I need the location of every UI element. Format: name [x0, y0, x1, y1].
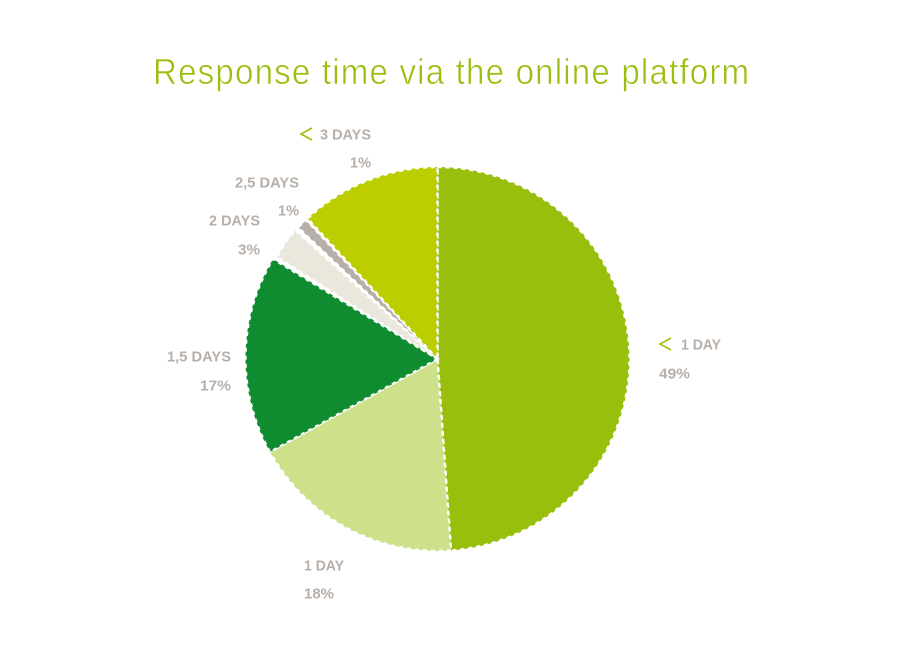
- label: less than 1 day: [659, 336, 721, 382]
- label: 2,5 days: [235, 174, 299, 220]
- label: less than 3 days: [301, 126, 371, 172]
- label: 1,5 days: [167, 348, 231, 394]
- label: less than 1 day: 1 DAY: [681, 336, 721, 354]
- slice: 1 day 18%: [270, 359, 451, 551]
- label: less than 3 days: 1%: [350, 154, 371, 172]
- slice: less than 1 day 49%: [438, 167, 630, 550]
- label: less than 3 days: 3 DAYS: [320, 126, 371, 144]
- title: Response time via the online platform: [153, 53, 749, 92]
- pie chart: [245, 167, 630, 551]
- slice: less than 3 days 1%: [308, 167, 438, 359]
- label: 1,5 days: 1,5 DAYS: [167, 348, 231, 366]
- icon: less-than sign: [660, 338, 671, 350]
- icon: less-than sign: [301, 128, 312, 140]
- label: 1,5 days: 17%: [200, 378, 231, 394]
- label: 2 days: [209, 212, 260, 258]
- label: less than 1 day: 49%: [659, 366, 690, 382]
- slice: 2 days 3%: [277, 230, 438, 359]
- label: 1 day: 18%: [304, 586, 334, 602]
- label: 2 days: 3%: [238, 242, 260, 258]
- label: 1 day: [304, 558, 344, 602]
- label: 1 day: 1 DAY: [304, 558, 344, 574]
- slice: 2,5 days 1%: [298, 220, 438, 359]
- label: 2,5 days: 1%: [278, 202, 299, 220]
- label: 2 days: 2 DAYS: [209, 212, 260, 230]
- label: 2,5 days: 2,5 DAYS: [235, 174, 299, 192]
- slice: 1,5 days 17%: [245, 259, 438, 452]
